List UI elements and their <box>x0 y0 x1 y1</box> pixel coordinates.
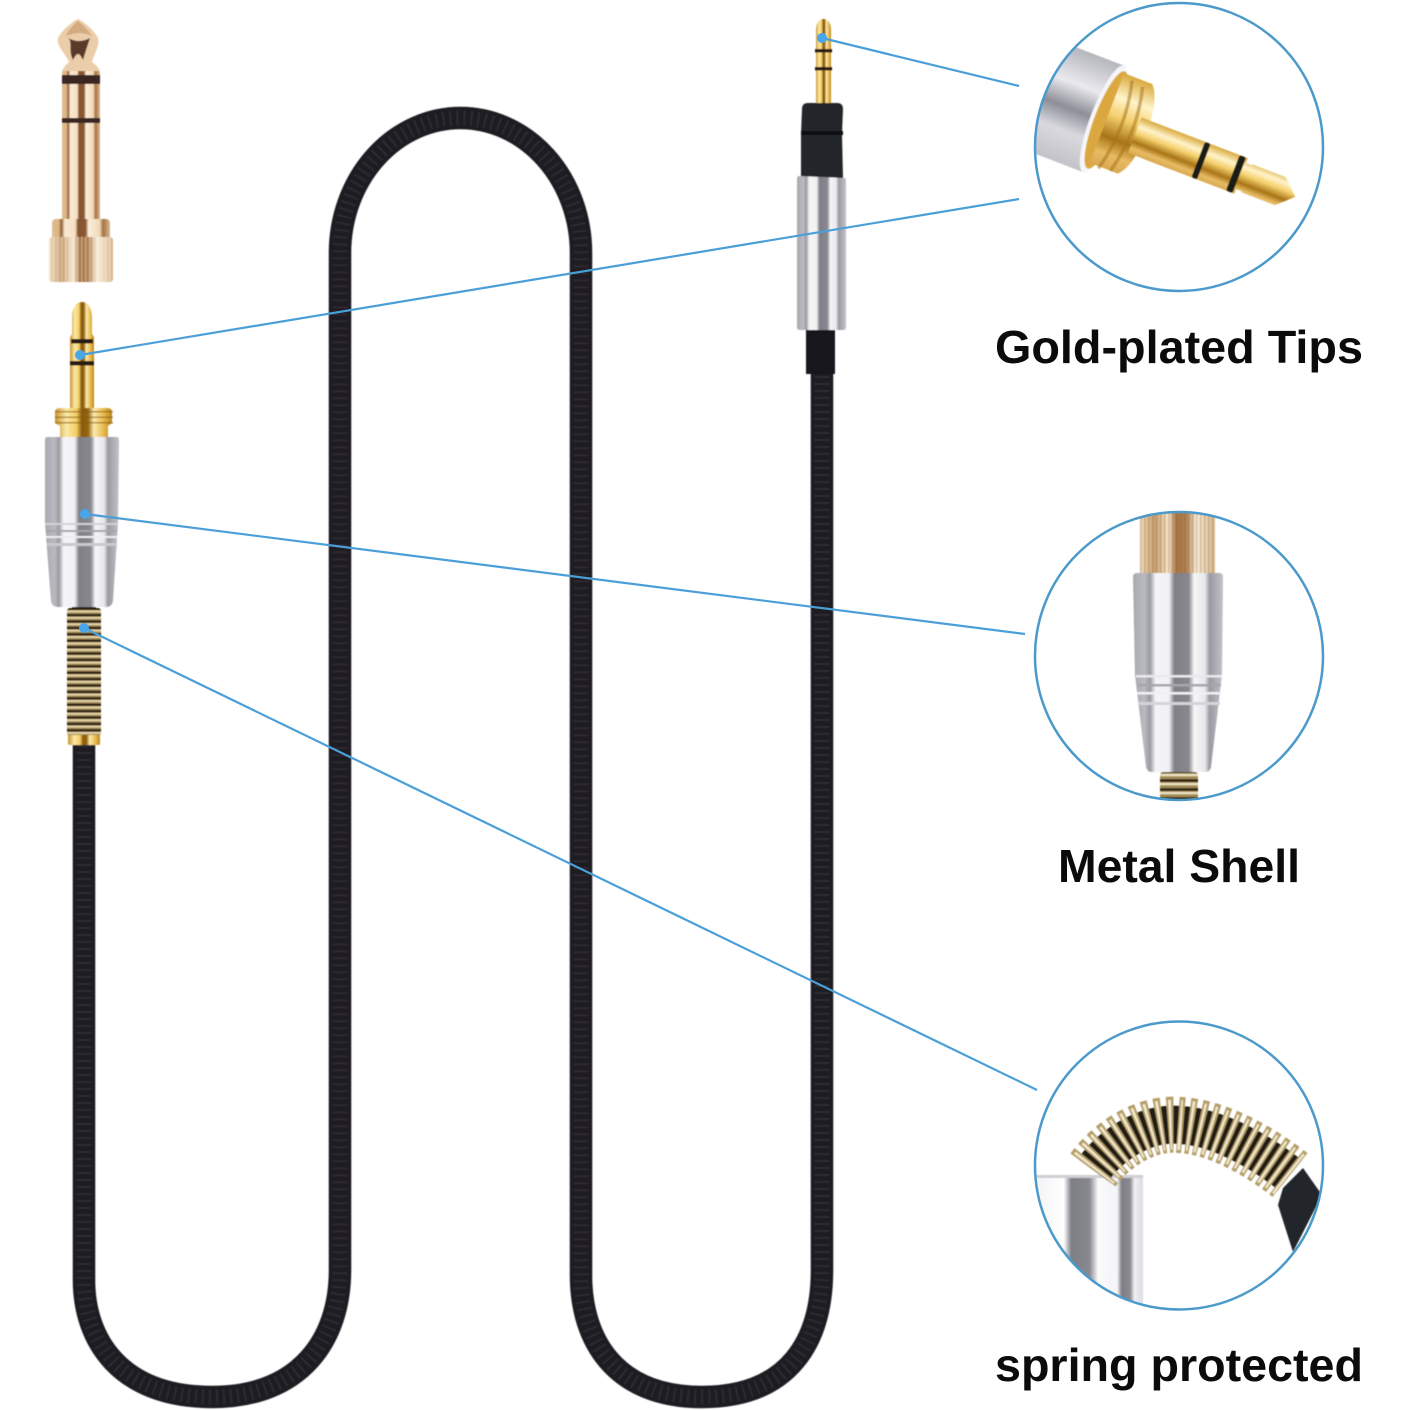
left 3.5mm gold plug <box>70 302 94 412</box>
label: Gold-plated Tips: Gold-plated Tips <box>995 321 1363 373</box>
callout: gold-plated tips detail <box>1034 2 1324 292</box>
right black strain relief <box>806 329 835 374</box>
braided black cable <box>84 118 822 1397</box>
circle outline <box>1035 3 1323 291</box>
left metal shell <box>45 437 119 607</box>
callout: spring protected detail <box>1035 1022 1323 1321</box>
label: spring protected: spring protected <box>995 1339 1363 1391</box>
leader: spring <box>79 623 1037 1090</box>
leader: gold tip right plug <box>817 33 1019 86</box>
leader: metal shell <box>80 509 1025 634</box>
right 3.5mm gold plug <box>815 19 832 105</box>
left spring <box>67 607 101 745</box>
circle outline <box>1035 512 1323 800</box>
callout: metal shell detail <box>1035 510 1323 802</box>
leader lines with dots <box>75 33 1037 1090</box>
leader: gold tip left plug <box>75 199 1019 360</box>
label: Metal Shell: Metal Shell <box>1058 840 1300 892</box>
circle outline <box>1035 1022 1323 1310</box>
quarter-inch gold adapter <box>49 19 113 282</box>
right black collar <box>801 103 843 178</box>
threaded gold collar <box>55 408 112 438</box>
right metal shell <box>797 176 846 330</box>
